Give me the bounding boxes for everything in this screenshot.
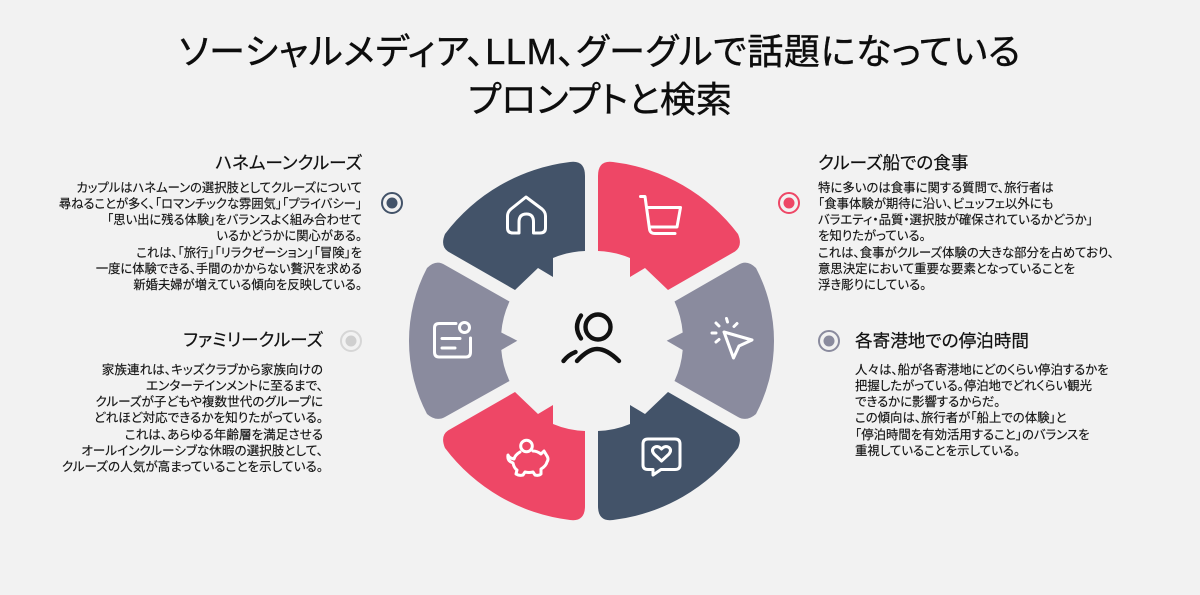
text: honeymoon cruise: 「思い出に残る体験」をバランスよく組み合わせて bbox=[107, 213, 362, 227]
marker: port time bbox=[819, 331, 839, 351]
text: port stay time bbox=[855, 363, 1109, 458]
text: dining on cruise ship: これは、食事がクルーズ体験の大きな部分を占めており、 bbox=[818, 246, 1114, 260]
icon: shopping cart bbox=[640, 196, 680, 234]
title: ソーシャルメディア、LLM、グーグルで話題になっている bbox=[179, 31, 1021, 72]
title bbox=[179, 31, 1021, 120]
icon: central person bbox=[564, 314, 619, 361]
heading: honeymoon cruise: ハネムーンクルーズ bbox=[215, 153, 362, 173]
marker: family bbox=[341, 331, 361, 351]
segment: left grey bbox=[409, 263, 517, 419]
text: family cruise: これは、あらゆる年齢層を満足させる bbox=[125, 428, 323, 442]
title: プロンプトと検索 bbox=[468, 79, 732, 120]
text: honeymoon cruise: これは、「旅行」「リラクゼーション」「冒険」を bbox=[136, 246, 362, 260]
segment: top-right red bbox=[598, 162, 740, 290]
text: dining on cruise ship: 特に多いのは食事に関する質問で、旅行者は bbox=[818, 181, 1054, 195]
text: family cruise: エンターテインメントに至るまで、 bbox=[146, 379, 323, 393]
text: dining on cruise ship: 意思決定において重要な要素となっていることを bbox=[818, 262, 1075, 276]
icon: piggy bank bbox=[508, 440, 548, 475]
text: dining on cruise ship: を知りたがっている。 bbox=[818, 229, 926, 243]
heading: dining on cruise ship: クルーズ船での食事 bbox=[818, 153, 968, 173]
segment: right grey bbox=[667, 263, 774, 419]
heading: port stay time: 各寄港地での停泊時間 bbox=[855, 331, 1029, 351]
segment: top-left navy bbox=[443, 162, 585, 290]
text: port stay time: 人々は、船が各寄港地にどのくらい停泊するかを bbox=[855, 363, 1109, 377]
icon: note card bbox=[434, 322, 470, 357]
heading: family cruise: ファミリークルーズ bbox=[183, 330, 323, 350]
text: honeymoon cruise: 新婚夫婦が増えている傾向を反映している。 bbox=[133, 278, 362, 292]
icon: heart speech bubble bbox=[643, 439, 680, 475]
text: dining on cruise ship bbox=[818, 181, 1114, 292]
text: honeymoon cruise: 一度に体験できる、手間のかからない贅沢を求める bbox=[96, 262, 362, 276]
segment: bottom-right navy bbox=[598, 392, 740, 520]
icon: house bbox=[508, 197, 546, 233]
marker: honeymoon bbox=[382, 193, 402, 213]
text: honeymoon cruise: いるかどうかに関心がある。 bbox=[216, 229, 362, 243]
marker: dining bbox=[779, 193, 799, 213]
text: family cruise: 家族連れは、キッズクラブから家族向けの bbox=[102, 363, 323, 377]
text: dining on cruise ship: バラエティ・品質・選択肢が確保されているかどうか」 bbox=[818, 213, 1093, 227]
text: honeymoon cruise bbox=[59, 181, 362, 292]
text: dining on cruise ship: 浮き彫りにしている。 bbox=[818, 278, 926, 292]
text: honeymoon cruise: カップルはハネムーンの選択肢としてクルーズについて bbox=[76, 181, 362, 195]
text: port stay time: 「停泊時間を有効活用すること」のバランスを bbox=[855, 428, 1090, 442]
text: honeymoon cruise: 尋ねることが多く、「ロマンチックな雰囲気」「プライバシー」 bbox=[59, 197, 362, 211]
text: family cruise: クルーズが子どもや複数世代のグループに bbox=[95, 395, 323, 409]
text: family cruise: どれほど対応できるかを知りたがっている。 bbox=[94, 411, 323, 425]
text: port stay time: 把握したがっている。停泊地でどれくらい観光 bbox=[855, 379, 1092, 393]
text: port stay time: できるかに影響するからだ。 bbox=[855, 395, 1000, 409]
text: port stay time: この傾向は、旅行者が「船上での体験」と bbox=[855, 411, 1067, 425]
text: family cruise: オールインクルーシブな休暇の選択肢として、 bbox=[81, 444, 323, 458]
icon: cursor click bbox=[712, 318, 752, 358]
text: dining on cruise ship: 「食事体験が期待に沿い、ビュッフェ以外にも bbox=[818, 197, 1053, 211]
text: family cruise bbox=[62, 363, 323, 474]
segment: bottom-left red bbox=[443, 392, 585, 520]
text: port stay time: 重視していることを示している。 bbox=[855, 444, 1020, 458]
text: family cruise: クルーズの人気が高まっていることを示している。 bbox=[62, 460, 323, 474]
